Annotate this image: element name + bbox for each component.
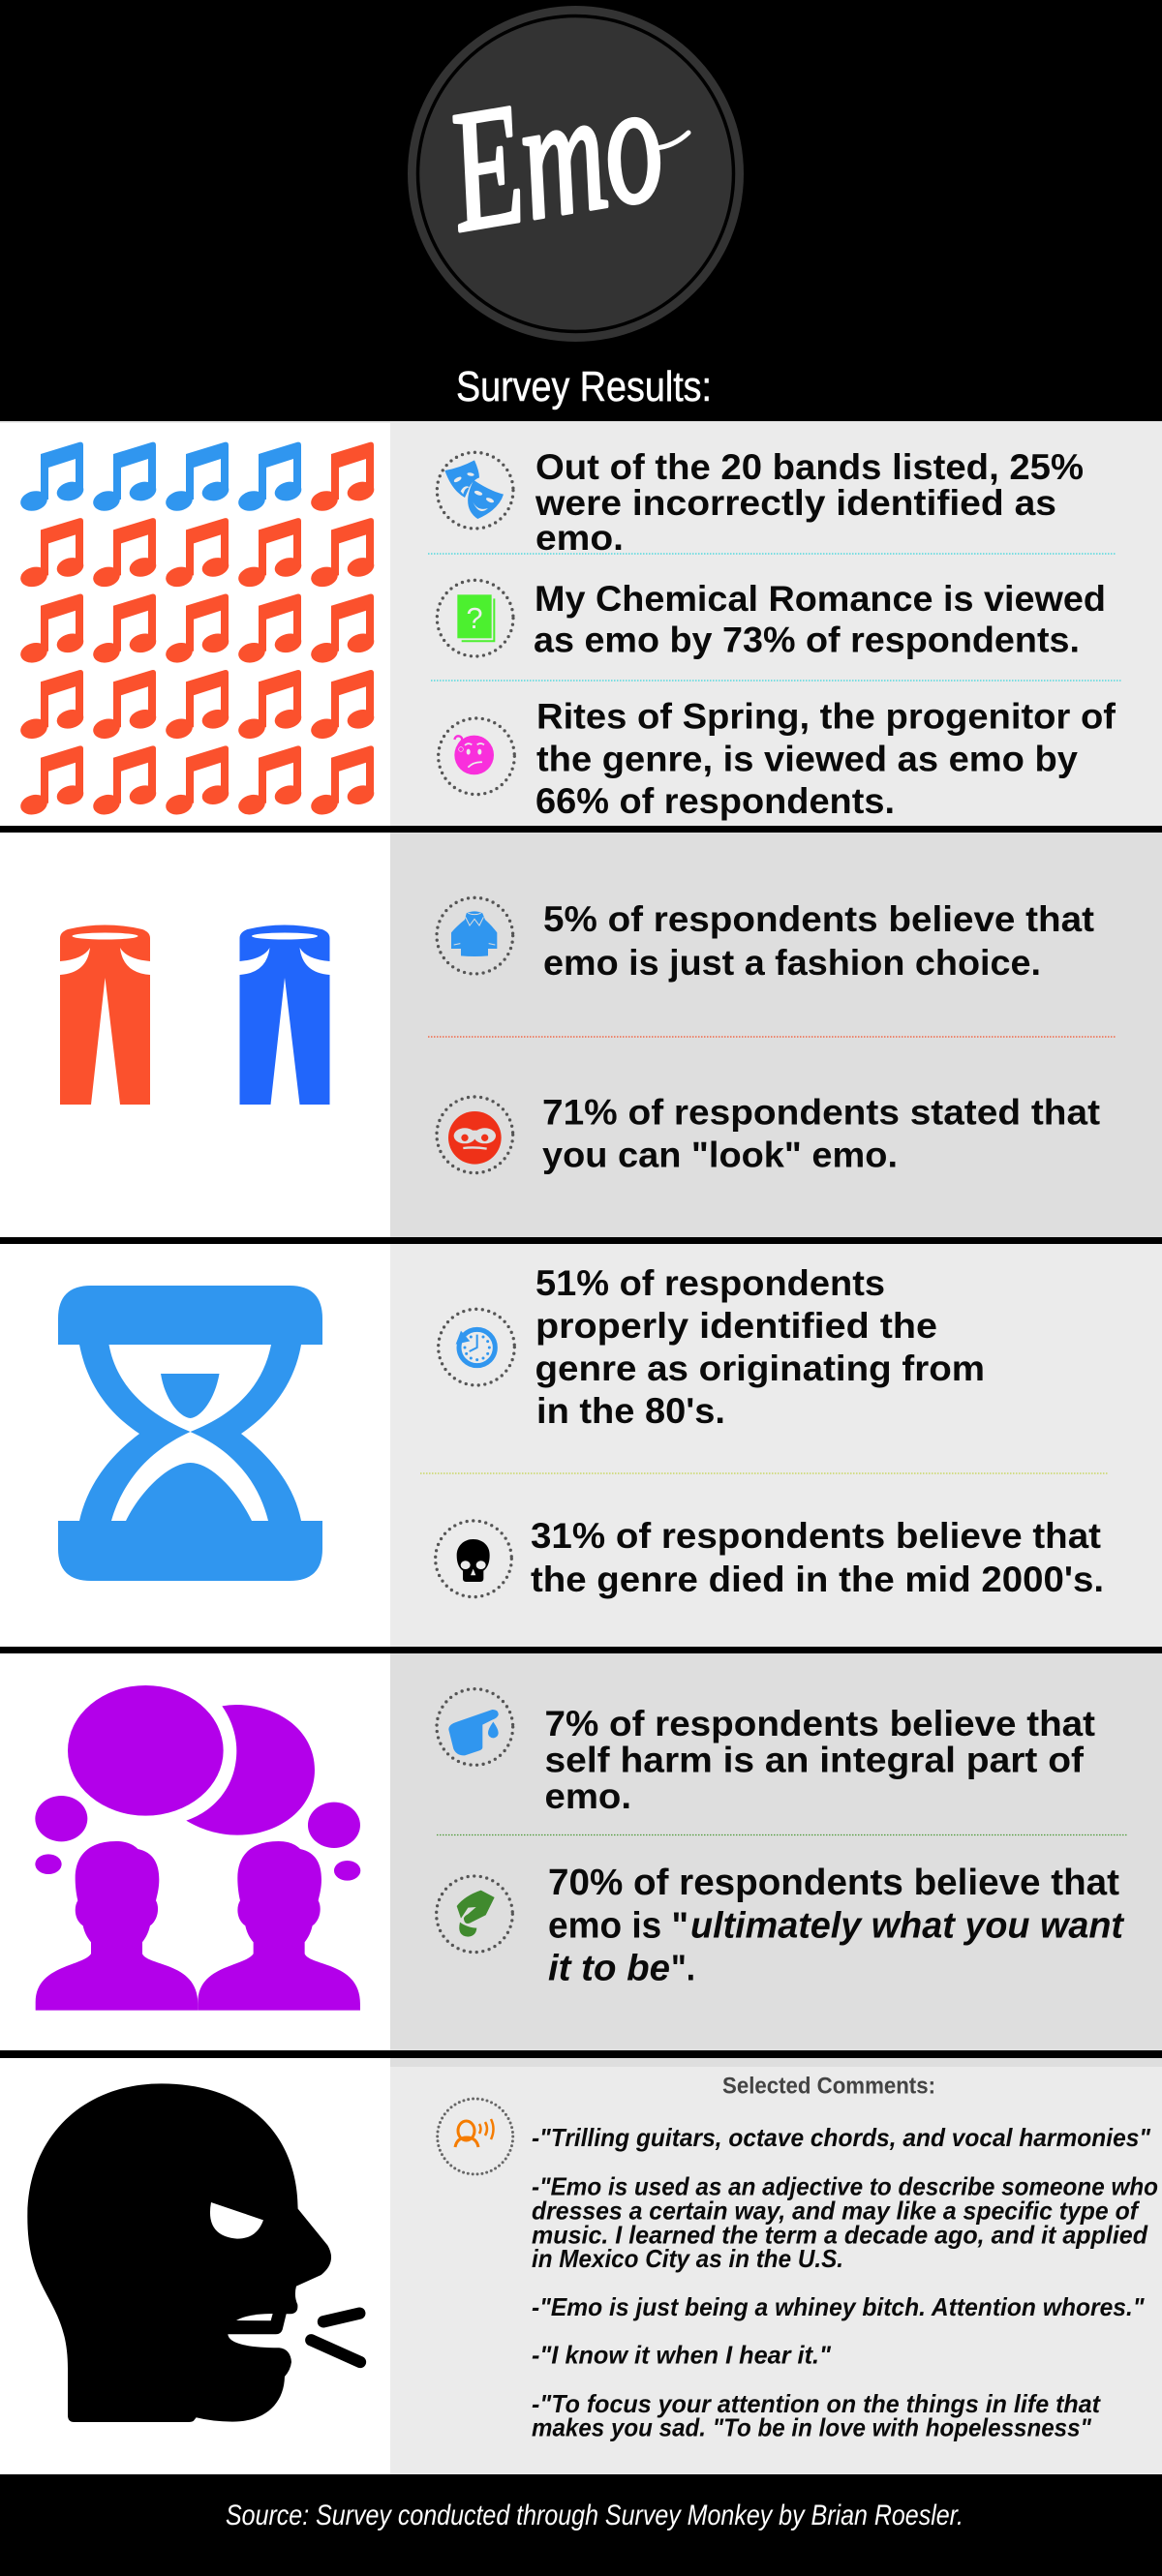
icon: person speaking	[438, 2099, 513, 2174]
text: 31% genre died	[531, 1516, 1104, 1599]
section backgrounds	[0, 421, 1162, 2479]
text: 70% what you want it to be: 70% of respondents believe that	[548, 1863, 1119, 1903]
text: Rites of Spring 66%: the genre, is viewed as emo by	[536, 740, 1078, 778]
text: selected comments list: -"Emo is just being a whiney bitch. Attention whores."	[532, 2292, 1145, 2321]
icon: confused pink face	[439, 718, 514, 795]
heading: Selected Comments: Selected Comments:	[722, 2074, 935, 2099]
text: 25% incorrectly identified: Out of the 20 bands listed, 25%	[535, 447, 1084, 487]
text: Rites of Spring 66%: 66% of respondents.	[535, 781, 895, 821]
text: 7% self harm: 7% of respondents believe that	[544, 1704, 1095, 1743]
text: selected comments list: -"I know it when I hear it."	[532, 2341, 832, 2370]
text: selected comments list: dresses a certain way, and may like a specific type of	[532, 2196, 1140, 2225]
text: My Chemical Romance 73%	[534, 579, 1106, 660]
text: 71% look emo: 71% of respondents stated that	[542, 1092, 1100, 1133]
text: 70% what you want it to be: it to be	[548, 1948, 670, 1988]
text: 31% genre died: the genre died in the mid 2000's.	[531, 1560, 1104, 1599]
text: 70% what you want it to be: ".	[671, 1948, 695, 1988]
text: 7% self harm: self harm is an integral part of	[544, 1741, 1085, 1779]
text: 7% self harm: emo.	[544, 1776, 631, 1816]
text: 5% fashion choice: emo is just a fashion choice.	[543, 943, 1041, 983]
title badge: Emo	[408, 6, 744, 342]
icon: blue shirt	[437, 897, 513, 974]
icon: green hand and drop	[437, 1876, 512, 1953]
icon: red and blue trousers	[60, 925, 329, 1105]
text: 25% incorrectly identified: emo.	[535, 518, 624, 558]
heading: Survey Results: Survey Results:	[456, 363, 712, 410]
text: Rites of Spring 66%: Rites of Spring, the progenitor of	[536, 697, 1116, 736]
text: My Chemical Romance 73%: My Chemical Romance is viewed	[535, 579, 1106, 619]
icon: green book with question mark: ?	[466, 602, 483, 635]
text: 5% fashion choice	[543, 899, 1094, 983]
icon: skull	[436, 1521, 511, 1597]
icon: speaking head	[27, 2083, 360, 2422]
text: 51% originating in the 80's: in the 80's.	[536, 1391, 725, 1431]
text: 51% originating in the 80's	[535, 1263, 985, 1431]
text: 71% look emo	[542, 1092, 1100, 1175]
text: selected comments list: music. I learned the term a decade ago, and it applied	[532, 2221, 1148, 2250]
icon grid: 25 music notes, 4 blue and 21 red	[18, 442, 376, 817]
text: 51% originating in the 80's: properly identified the	[535, 1306, 937, 1346]
icon: theatre masks	[437, 452, 513, 529]
text: My Chemical Romance 73%: as emo by 73% of respondents.	[534, 620, 1080, 660]
icon: two people with thought bubbles	[35, 1685, 360, 2011]
icon: green book with question mark	[437, 580, 513, 656]
text: selected comments list: makes you sad. "To be in love with hopelessness"	[532, 2412, 1092, 2441]
title badge: Emo: Emo	[434, 44, 675, 268]
text: selected comments list: in Mexico City as in the U.S.	[532, 2244, 843, 2273]
text: 31% genre died: 31% of respondents believe that	[531, 1516, 1101, 1556]
text: 51% originating in the 80's: genre as originating from	[535, 1349, 985, 1388]
text: 5% fashion choice: 5% of respondents believe that	[543, 899, 1094, 939]
text: 70% what you want it to be: emo is "	[548, 1905, 688, 1946]
text: 7% self harm	[544, 1704, 1095, 1816]
icon: pointing hand with drop	[437, 1689, 513, 1765]
text: selected comments list	[532, 2123, 1158, 2441]
text: 25% incorrectly identified	[535, 447, 1084, 558]
icon: clock with rewind arrow	[439, 1309, 514, 1385]
text: 25% incorrectly identified: were incorrectly identified as	[535, 483, 1056, 523]
icon: blue hourglass	[58, 1286, 322, 1581]
text: Rites of Spring 66%	[535, 697, 1116, 821]
text: 70% what you want it to be: ultimately what you want	[690, 1905, 1124, 1946]
text: 70% what you want it to be	[548, 1863, 1124, 1988]
text: selected comments list: -"To focus your attention on the things in life that	[532, 2389, 1101, 2418]
text: 71% look emo: you can "look" emo.	[542, 1135, 898, 1175]
header band	[0, 0, 1162, 421]
footer band	[0, 2474, 1162, 2576]
text: 51% originating in the 80's: 51% of respondents	[535, 1263, 885, 1303]
icon: red face with glasses	[437, 1097, 513, 1173]
source note: Source: Survey conducted through Survey Monkey by Brian Roesler.	[226, 2500, 963, 2531]
